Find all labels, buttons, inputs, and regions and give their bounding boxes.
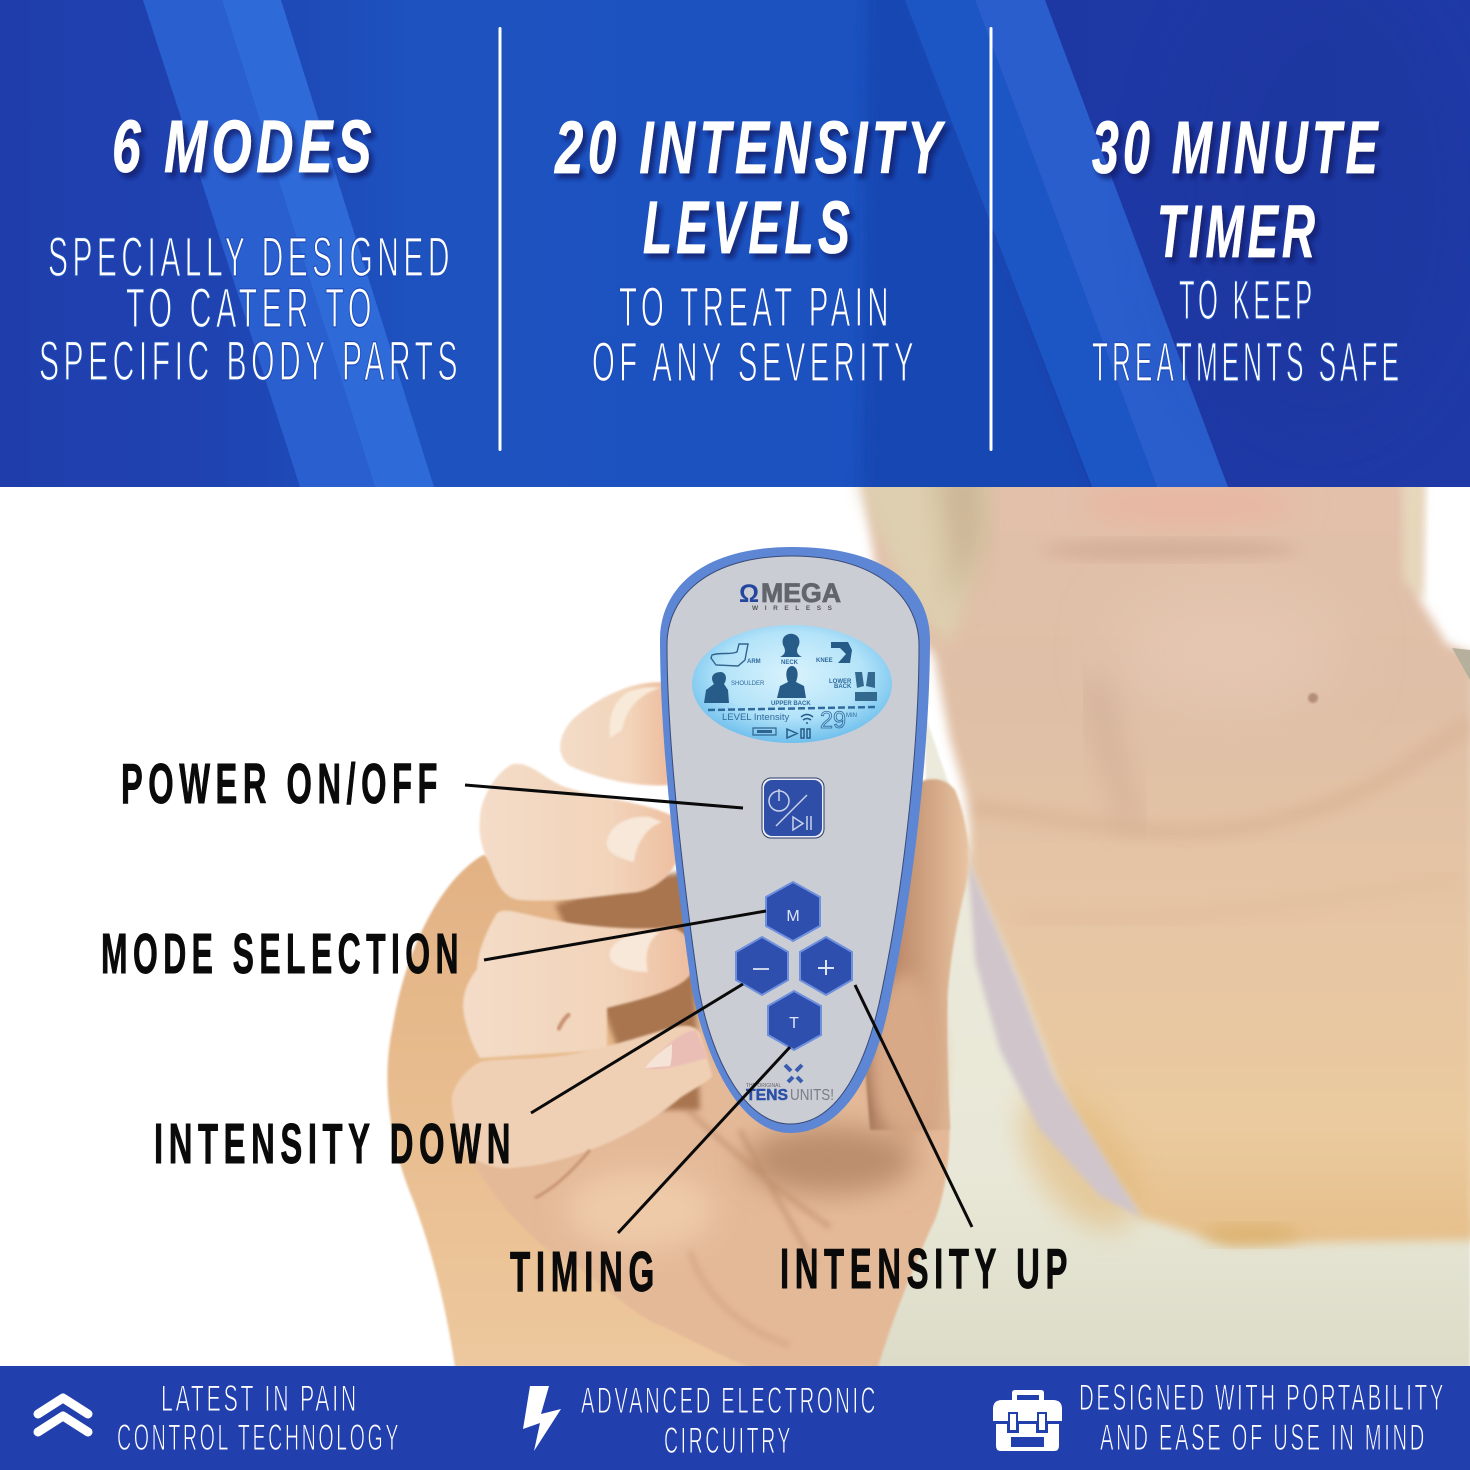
callout: intensity down bbox=[154, 984, 743, 1176]
column: 30 minute timer bbox=[1092, 106, 1403, 393]
callout: intensity down: INTENSITY DOWN bbox=[154, 1112, 516, 1176]
icon: double chevron up bbox=[38, 1398, 88, 1432]
clavicle shade bbox=[1020, 880, 1460, 919]
description: TO TREAT PAIN bbox=[619, 275, 893, 338]
logo: tens units: THE ORIGINAL bbox=[746, 1083, 782, 1089]
logo: omega wireless: MEGA bbox=[761, 578, 841, 608]
description bbox=[39, 225, 462, 392]
benefit text: technology: CONTROL TECHNOLOGY bbox=[117, 1417, 401, 1458]
divider right bbox=[990, 27, 992, 451]
neck highlight bbox=[1120, 590, 1340, 710]
callout: intensity up: INTENSITY UP bbox=[780, 1237, 1073, 1301]
lcd icon: upper back bbox=[777, 666, 806, 698]
lcd labels: SHOULDER bbox=[731, 681, 765, 687]
column: 20 intensity levels bbox=[554, 106, 946, 393]
icon: case bbox=[993, 1390, 1062, 1451]
chin highlight bbox=[1080, 483, 1300, 527]
description bbox=[1092, 268, 1403, 393]
chin shadow bbox=[1040, 540, 1300, 560]
heading bbox=[554, 106, 946, 269]
lcd divider bbox=[708, 707, 876, 710]
button: T: T bbox=[789, 1015, 799, 1032]
lcd labels: BACK bbox=[834, 684, 852, 690]
index finger bbox=[560, 682, 668, 785]
heading bbox=[1092, 106, 1382, 273]
middle finger bbox=[479, 764, 682, 901]
heading: TIMER bbox=[1157, 190, 1319, 273]
heading: 20 INTENSITY bbox=[554, 106, 946, 189]
logo: omega wireless bbox=[739, 578, 841, 612]
button: T bbox=[768, 991, 821, 1050]
finger gaps shadow bbox=[555, 870, 700, 1110]
callout: timing: TIMING bbox=[510, 1240, 660, 1304]
power button bbox=[762, 778, 824, 838]
neck tendon bbox=[1095, 680, 1135, 825]
button: plus bbox=[800, 937, 852, 995]
device body bbox=[660, 547, 930, 1133]
benefit text: portability bbox=[1079, 1377, 1446, 1458]
benefit text: technology bbox=[117, 1378, 401, 1458]
mole bbox=[1308, 693, 1318, 703]
description: SPECIALLY DESIGNED bbox=[48, 225, 454, 288]
lcd labels bbox=[722, 658, 857, 734]
lcd labels: LEVEL Intensity bbox=[722, 712, 789, 723]
lcd icon: shoulder bbox=[704, 672, 729, 703]
ring finger bbox=[463, 911, 694, 1058]
little finger bbox=[452, 1026, 712, 1168]
logo: tens units: TENS bbox=[746, 1087, 788, 1104]
strap shoulder bbox=[1452, 648, 1470, 680]
heading: LEVELS bbox=[643, 186, 854, 269]
chest tone bbox=[997, 1069, 1163, 1251]
lcd labels: UPPER BACK bbox=[771, 701, 811, 707]
description bbox=[592, 275, 918, 393]
device bbox=[660, 547, 930, 1133]
callout: mode selection: MODE SELECTION bbox=[101, 922, 464, 986]
button: M bbox=[766, 882, 820, 941]
lcd labels: ARM bbox=[747, 659, 761, 665]
button: minus bbox=[736, 937, 788, 995]
benefit text: circuitry bbox=[581, 1380, 878, 1461]
lcd icon: neck bbox=[780, 634, 802, 657]
benefit text: technology: LATEST IN PAIN bbox=[161, 1378, 359, 1419]
collar crease bbox=[969, 723, 1470, 831]
lcd labels: NECK bbox=[781, 660, 799, 666]
lcd screen bbox=[692, 625, 892, 743]
hand palm and thumb bbox=[470, 779, 968, 1367]
lcd icon: play pause bbox=[787, 729, 810, 738]
button: M: M bbox=[786, 908, 800, 925]
arm bbox=[387, 855, 800, 1367]
lcd labels: KNEE bbox=[816, 658, 833, 664]
hair left bbox=[852, 487, 962, 634]
callout: power on/off: POWER ON/OFF bbox=[121, 752, 443, 816]
callout: timing bbox=[510, 1047, 790, 1304]
logo: tens units: UNITS! bbox=[790, 1087, 834, 1104]
panel: photo of woman holding device bbox=[386, 487, 1470, 1366]
column: 6 modes bbox=[39, 105, 462, 392]
bra strap bbox=[968, 860, 1142, 1218]
panel: bottom benefits band bbox=[0, 1366, 1470, 1470]
lcd labels: MIN bbox=[846, 713, 857, 719]
description: TO CATER TO bbox=[126, 276, 376, 339]
lcd icon: arm bbox=[711, 644, 748, 666]
lcd labels: 29 bbox=[820, 707, 846, 734]
logo: omega wireless: Ω bbox=[739, 580, 759, 608]
hair right bbox=[1402, 470, 1424, 600]
benefit text: circuitry: ADVANCED ELECTRONIC bbox=[581, 1380, 878, 1421]
logo: tens units bbox=[746, 1065, 834, 1104]
description: OF ANY SEVERITY bbox=[592, 330, 918, 393]
logo: omega wireless: WIRELESS bbox=[752, 605, 833, 612]
hair strands bbox=[933, 487, 990, 589]
benefit text: circuitry: CIRCUITRY bbox=[664, 1420, 793, 1461]
tank top bbox=[870, 715, 1470, 1367]
description: SPECIFIC BODY PARTS bbox=[39, 329, 462, 392]
icon: lightning bolt bbox=[523, 1386, 561, 1451]
lcd icon: battery level bbox=[757, 730, 772, 733]
lcd icon: battery bbox=[753, 728, 776, 735]
lcd icon: wifi bbox=[801, 714, 813, 723]
lcd icon: lower back bbox=[855, 672, 877, 701]
torso and neck bbox=[860, 470, 1470, 1251]
heading: 6 MODES bbox=[112, 105, 376, 188]
divider left bbox=[498, 27, 502, 451]
panel: top feature band bbox=[0, 0, 1470, 500]
fingers bbox=[452, 682, 712, 1198]
callout: intensity up bbox=[780, 985, 1073, 1301]
lcd labels: LOWER bbox=[829, 679, 852, 685]
lcd icon: knee bbox=[831, 642, 852, 663]
